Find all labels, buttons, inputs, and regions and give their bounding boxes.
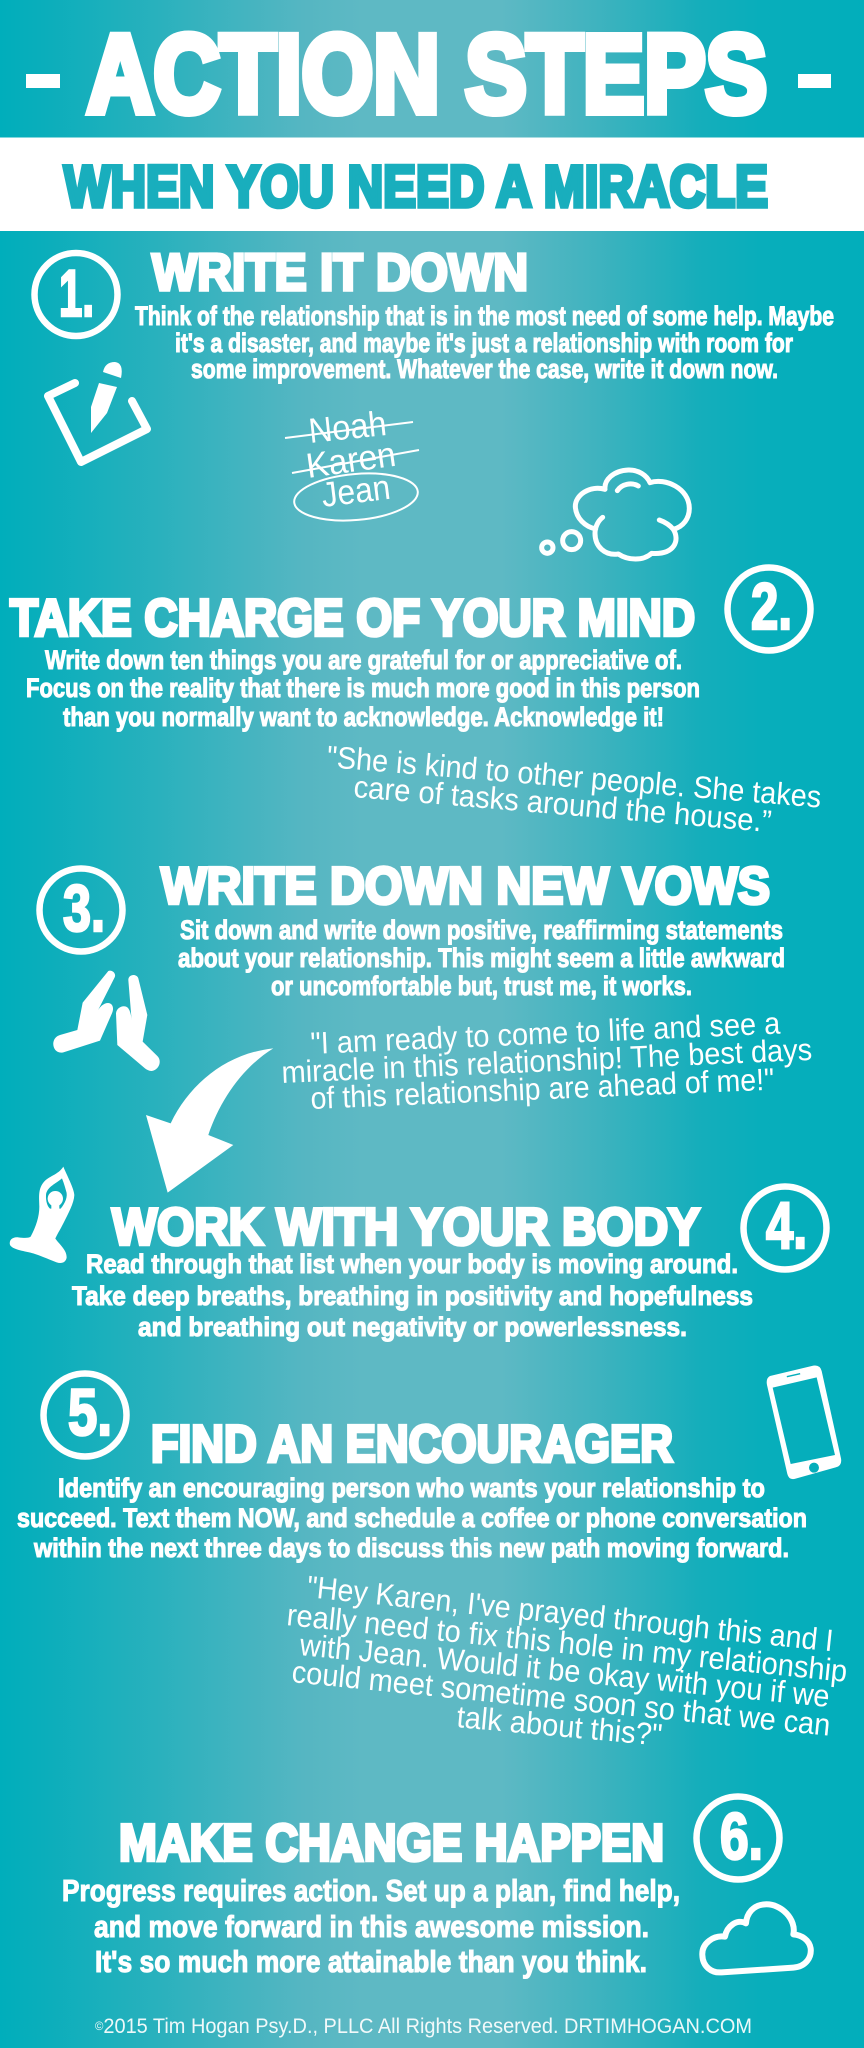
icon: meditating figure xyxy=(10,1167,74,1263)
heading: write down new vows: WRITE DOWN NEW VOWS xyxy=(161,858,770,916)
icon: praying hands xyxy=(53,971,160,1071)
quote: ready to come to life xyxy=(281,1005,813,1116)
quote: hey karen: "Hey Karen, I've prayed through this and I xyxy=(305,1569,835,1658)
text block: step 3 body: or uncomfortable but, trust me, it works. xyxy=(271,971,692,1001)
text block: step 5 body: Identify an encouraging person who wants your relationship to xyxy=(58,1473,765,1503)
text block: step 2 body: than you normally want to acknowledge. Acknowledge it! xyxy=(63,702,664,732)
text block: step 4 body: and breathing out negativity or powerlessness. xyxy=(138,1312,687,1342)
heading: work with your body: WORK WITH YOUR BODY xyxy=(112,1198,700,1256)
heading: make change happen: MAKE CHANGE HAPPEN xyxy=(119,1814,664,1872)
icon: pencil and paper xyxy=(48,362,147,462)
text block: step 4 body xyxy=(72,1249,753,1342)
text block: step 3 body xyxy=(178,915,785,1001)
panel: step 1 write it down xyxy=(34,244,834,559)
text block: step 6 body: Progress requires action. Set up a plan, find help, xyxy=(62,1873,680,1908)
panel: step 2 take charge of your mind xyxy=(10,568,823,839)
panel: step 5 find an encourager xyxy=(17,1366,849,1753)
handwritten list of names xyxy=(285,404,420,525)
number badge 3 xyxy=(40,868,122,952)
text block: step 4 body: Read through that list when your body is moving around. xyxy=(86,1249,738,1279)
quote: she is kind: care of tasks around the house.” xyxy=(352,769,773,839)
number badge 3: 3. xyxy=(63,871,105,945)
number badge 4: 4. xyxy=(766,1188,807,1262)
number badge 2: 2. xyxy=(751,569,792,643)
text block: step 2 body xyxy=(26,645,700,732)
icon: smartphone xyxy=(767,1366,841,1479)
number badge 6: 6. xyxy=(720,1799,763,1873)
text block: step 5 body xyxy=(17,1473,807,1563)
subtitle band xyxy=(0,138,864,231)
handwritten list of names: Karen xyxy=(304,435,398,486)
text block: step 2 body: Write down ten things you are grateful for or appreciative of. xyxy=(45,645,682,675)
heading: write it down: WRITE IT DOWN xyxy=(152,244,528,302)
text block: step 6 body xyxy=(62,1873,680,1979)
handwritten list of names: Jean xyxy=(319,468,392,515)
text block: step 4 body: Take deep breaths, breathing in positivity and hopefulness xyxy=(72,1281,753,1311)
number badge 5: 5. xyxy=(68,1375,112,1449)
quote: ready to come to life: of this relationship are ahead of me!" xyxy=(310,1062,775,1116)
quote: hey karen: talk about this?" xyxy=(455,1699,664,1753)
number badge 1 xyxy=(34,253,118,336)
footer copyright: © xyxy=(95,2019,104,2033)
text block: step 2 body: Focus on the reality that there is much more good in this person xyxy=(26,673,700,703)
quote: hey karen: with Jean. Would it be okay with you if we xyxy=(297,1627,831,1714)
quote: hey karen xyxy=(285,1569,849,1753)
quote: ready to come to life: miracle in this relationship! The best days xyxy=(281,1032,813,1090)
text block: step 6 body: and move forward in this awesome mission. xyxy=(94,1909,649,1944)
icon: cloud xyxy=(702,1904,811,1972)
number badge 5 xyxy=(44,1374,126,1456)
footer copyright: 2015 Tim Hogan Psy.D., PLLC All Rights Reserved. DRTIMHOGAN.COM xyxy=(103,2015,752,2038)
panel: step 3 write down new vows xyxy=(40,858,813,1193)
heading: take charge of your mind: TAKE CHARGE OF YOUR MIND xyxy=(10,590,695,648)
text block: step 1 body xyxy=(135,301,834,384)
handwritten list of names: Noah xyxy=(307,404,388,451)
quote: hey karen: could meet sometime soon so that we can xyxy=(290,1654,832,1743)
arrow: curved down to step 4 xyxy=(146,1048,273,1193)
number badge 6 xyxy=(696,1796,780,1880)
panel: step 6 make change happen xyxy=(62,1796,811,1979)
heading: find an encourager: FIND AN ENCOURAGER xyxy=(151,1416,673,1474)
quote: ready to come to life: "I am ready to come to life and see a xyxy=(310,1005,782,1061)
number badge 1: 1. xyxy=(59,256,94,330)
icon: thought cloud xyxy=(542,470,689,559)
text block: step 6 body: It's so much more attainable than you think. xyxy=(95,1944,647,1979)
number badge 2 xyxy=(728,568,810,650)
quote: she is kind: "She is kind to other people. She takes xyxy=(325,739,823,815)
panel: step 4 work with your body xyxy=(10,1167,827,1342)
number badge 4 xyxy=(744,1186,826,1270)
